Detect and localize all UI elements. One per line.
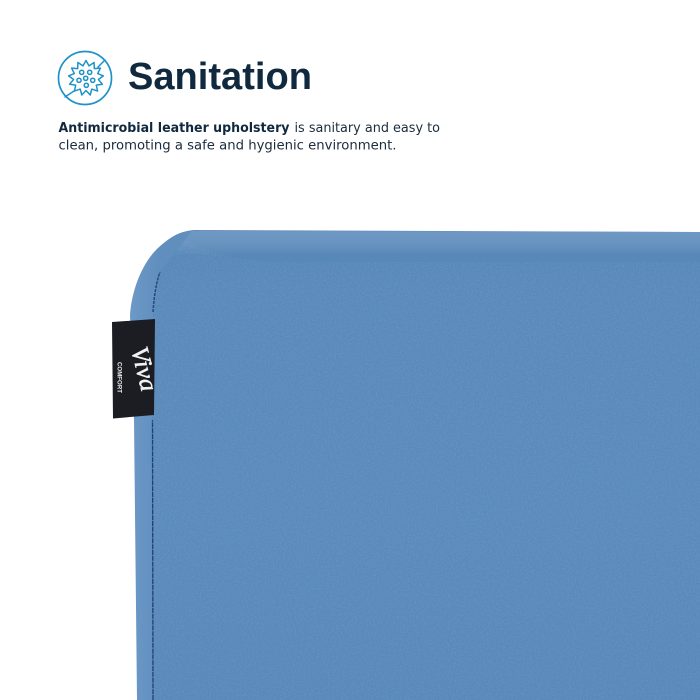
cushion front face [152,231,700,700]
label small text: COMFORT [116,362,122,393]
label script logo: Viva [125,344,162,394]
description text: clean, promoting a safe and hygienic environment. [58,138,396,154]
cushion: blue leather headboard [130,230,700,700]
description text: is sanitary and easy to [294,121,440,136]
leather grain [152,240,700,700]
bottom seam [152,420,154,700]
cushion side edge [130,230,700,700]
corner seam [153,272,160,312]
fabric label: Viva Comfort [112,319,162,418]
description text [58,121,440,154]
title: Sanitation [128,56,312,98]
icon: crossed-out microbe [58,52,112,104]
description text: Antimicrobial leather upholstery [58,121,290,136]
